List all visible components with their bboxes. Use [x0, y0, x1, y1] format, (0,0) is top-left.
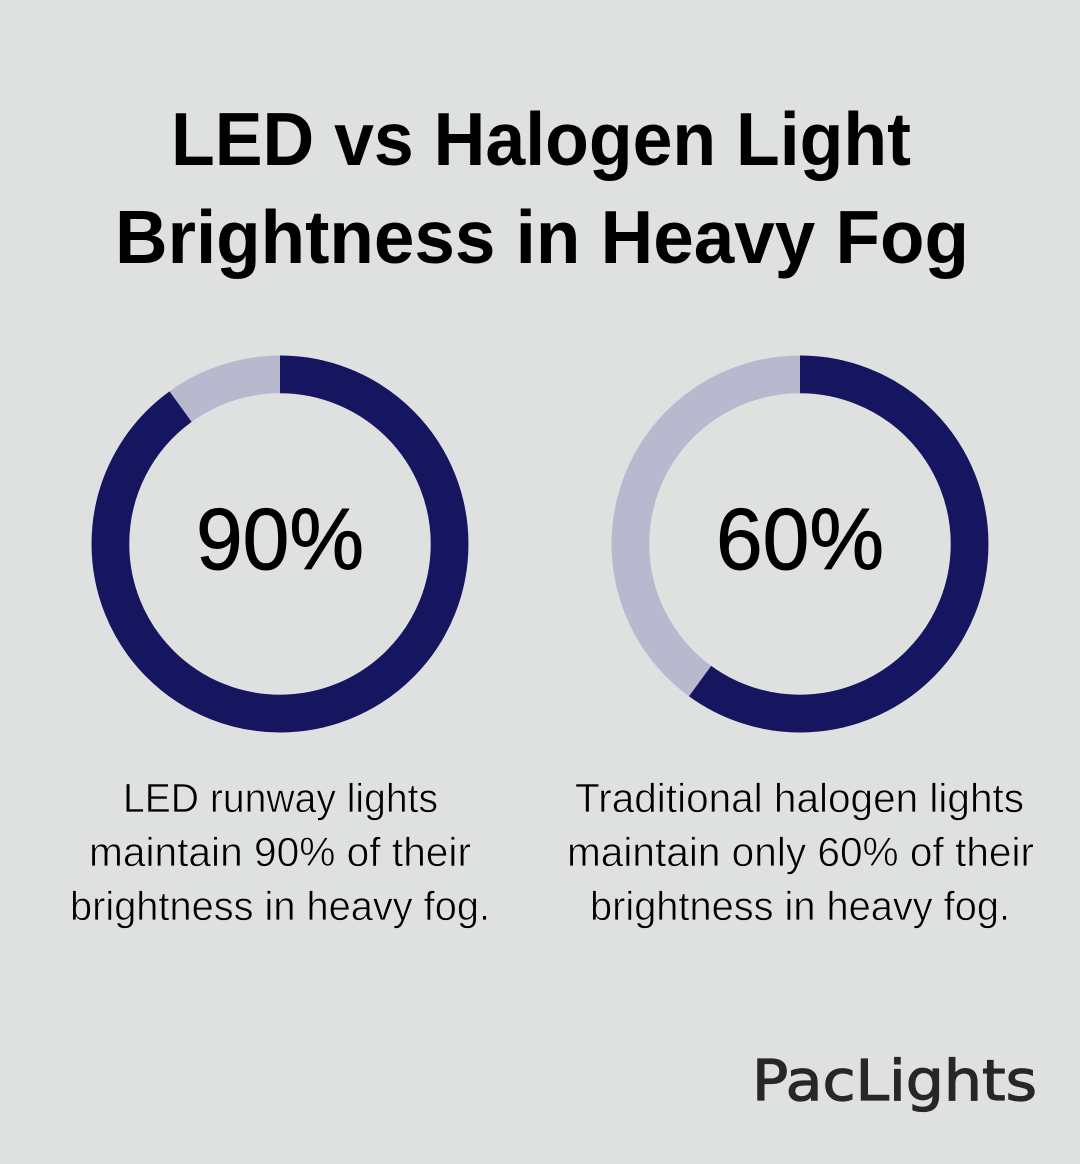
panel: Halogen — [567, 374, 1034, 929]
description: Halogen: brightness in heavy fog. — [590, 883, 1010, 929]
title — [115, 97, 969, 279]
logo: PacLights: PacLights — [752, 1049, 1037, 1114]
value: 60%: 60% — [716, 491, 884, 588]
value: 90%: 90% — [196, 491, 364, 588]
description: LED: brightness in heavy fog. — [70, 883, 490, 929]
title: Brightness in Heavy Fog — [115, 195, 969, 279]
donut chart: LED 90% — [110, 374, 450, 714]
description: Halogen: Traditional halogen lights — [575, 775, 1024, 821]
description: LED — [70, 775, 490, 929]
panel: LED — [70, 374, 490, 929]
title: LED vs Halogen Light — [171, 97, 911, 181]
description: Halogen: maintain only 60% of their — [567, 829, 1034, 875]
donut chart: Halogen 60% — [630, 374, 970, 714]
description: Halogen — [567, 775, 1034, 929]
description: LED: maintain 90% of their — [89, 829, 471, 875]
description: LED: LED runway lights — [123, 775, 438, 821]
